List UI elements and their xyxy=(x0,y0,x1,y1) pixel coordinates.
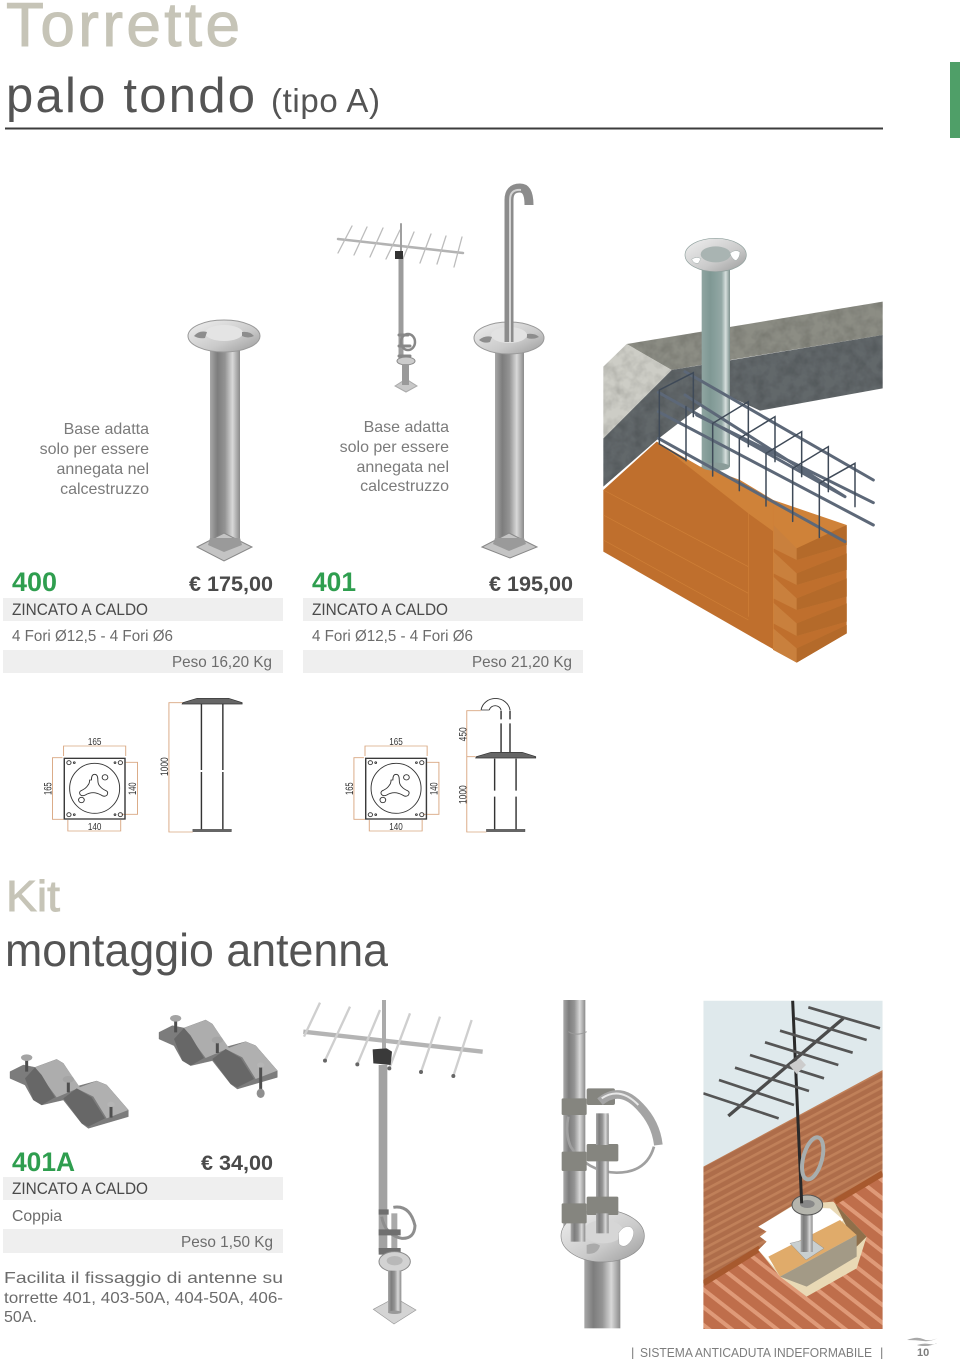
code 401A: 401A xyxy=(12,1147,75,1177)
base plate plan 400: 165 xyxy=(43,782,55,795)
weight band 400 xyxy=(3,650,283,673)
brick wall xyxy=(603,442,847,663)
clamp left xyxy=(10,1054,128,1128)
rebar cage xyxy=(658,372,873,542)
product card 401A xyxy=(3,1147,283,1253)
finish band 401A xyxy=(3,1177,283,1200)
product card 400 xyxy=(3,567,283,673)
side elevation 401: 1000 xyxy=(458,785,470,804)
base plate plan 401 xyxy=(345,737,441,833)
image: torretta 400 xyxy=(188,320,260,561)
weight band 401 xyxy=(303,650,583,673)
note: base 400: calcestruzzo xyxy=(60,481,149,498)
description: kit: torrette 401, 403-50A, 404-50A, 406- xyxy=(4,1290,283,1307)
base plate plan 401: 165 xyxy=(345,782,356,795)
weight 401A: Peso 1,50 Kg xyxy=(181,1234,273,1251)
holes 400: 4 Fori Ø12,5 - 4 Fori Ø6 xyxy=(12,628,173,645)
code 401: 401 xyxy=(312,567,356,597)
finish 401: ZINCATO A CALDO xyxy=(312,601,448,619)
finish 400: ZINCATO A CALDO xyxy=(12,601,148,619)
clamp right xyxy=(159,1015,277,1098)
base plate plan 401: 140 xyxy=(389,822,403,833)
note: base 400: solo per essere xyxy=(40,441,149,458)
title: Kit: Kit xyxy=(6,872,60,921)
description: kit: Facilita il fissaggio di antenne su xyxy=(4,1270,283,1287)
steel post xyxy=(685,238,746,471)
weight 401: Peso 21,20 Kg xyxy=(472,654,572,671)
price 400: € 175,00 xyxy=(189,573,273,596)
base plate plan 400: 140 xyxy=(88,822,102,833)
image: small antenna assembly xyxy=(338,224,463,392)
green section tab xyxy=(950,62,960,138)
note: base 401: calcestruzzo xyxy=(360,478,449,495)
base plate plan 401: 140 xyxy=(429,782,441,795)
base plate plan 400: 140 xyxy=(128,782,139,795)
subtitle: palo tondo (tipo A) xyxy=(6,69,380,123)
subtitle: montaggio antenna: montaggio antenna xyxy=(5,924,388,976)
icon: logo waves xyxy=(907,1338,938,1346)
image: torretta 401 with hook xyxy=(474,188,544,558)
image: detail of ring and clamps xyxy=(561,1000,658,1328)
image: pole embedded in reinforced brick wall xyxy=(603,238,883,663)
side elevation 400: 1000 xyxy=(160,757,171,776)
holes 401: 4 Fori Ø12,5 - 4 Fori Ø6 xyxy=(312,628,473,645)
product card 401 xyxy=(303,567,583,673)
side elevation 401: 450 xyxy=(458,727,470,741)
price 401A: € 34,00 xyxy=(201,1152,273,1175)
note: base 401: solo per essere xyxy=(340,439,449,456)
base plate plan 400: 165 xyxy=(88,737,102,748)
side elevation 401 xyxy=(458,698,536,832)
side elevation 400 xyxy=(160,698,242,832)
note: base 401: annegata nel xyxy=(356,459,449,476)
image: antenna mounted on tiled roof xyxy=(703,1001,883,1330)
heading rule xyxy=(5,128,883,130)
image: antenna kit assembled xyxy=(303,1000,483,1324)
description: kit: 50A. xyxy=(4,1309,37,1326)
concrete slab xyxy=(603,302,883,487)
note: base 400: Base adatta xyxy=(64,421,149,438)
technical drawing: model 400 xyxy=(43,698,242,833)
base plate plan 401: 165 xyxy=(389,737,403,748)
weight 400: Peso 16,20 Kg xyxy=(172,654,272,671)
finish band 400 xyxy=(3,598,283,621)
note: base 400: annegata nel xyxy=(56,461,149,478)
subtitle: palo tondo (tipo A): palo tondo xyxy=(6,69,255,123)
image: pair of clamps xyxy=(10,1015,277,1128)
base plate plan 400 xyxy=(43,737,139,833)
note: base 401: Base adatta xyxy=(364,419,449,436)
page number: 10 xyxy=(917,1347,929,1359)
weight band 401A xyxy=(3,1229,283,1253)
finish 401A: ZINCATO A CALDO xyxy=(12,1180,148,1198)
subtitle: palo tondo (tipo A): (tipo A) xyxy=(271,82,380,119)
price 401: € 195,00 xyxy=(489,573,573,596)
technical drawing: model 401 xyxy=(345,698,536,833)
quantity 401A: Coppia xyxy=(12,1208,62,1225)
code 400: 400 xyxy=(12,567,57,597)
description: kit xyxy=(4,1270,283,1326)
finish band 401 xyxy=(303,598,583,621)
